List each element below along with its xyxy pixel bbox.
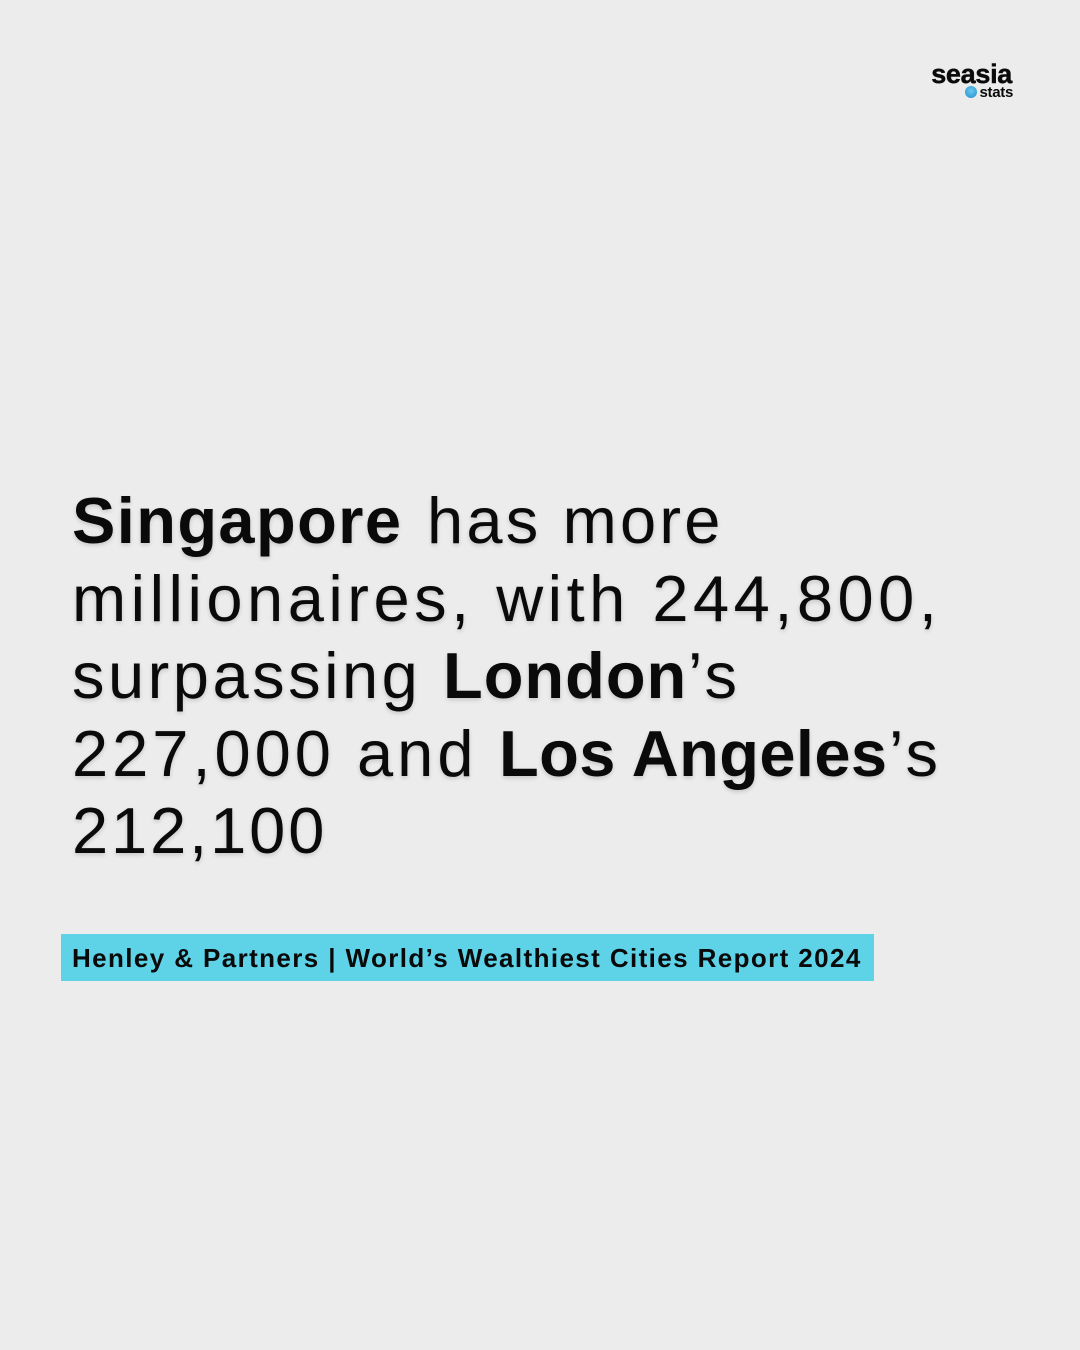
headline line 4: ’s [889, 717, 941, 790]
logo: seasia stats [931, 59, 1013, 101]
headline line 5: 212,100 [72, 794, 327, 867]
headline line 4: 227,000 and [72, 717, 477, 790]
headline line 3: ’s [688, 639, 740, 712]
headline line 3: London [443, 639, 687, 712]
source text: Henley & Partners | World’s Wealthiest Cities Report 2024 [72, 943, 862, 973]
headline [72, 484, 941, 867]
headline line 1 [72, 484, 724, 560]
logo subword: stats [979, 84, 1013, 101]
headline line 3: surpassing [72, 639, 421, 712]
headline line 4: Los Angeles [499, 717, 887, 790]
source label [61, 934, 874, 981]
headline line 1: Singapore [72, 484, 402, 557]
headline line 2: millionaires, with 244,800, [72, 562, 941, 635]
headline line 1: has more [427, 484, 724, 557]
logo wordmark: seasia [931, 59, 1012, 89]
logo dot icon [965, 86, 977, 98]
headline line 3 [72, 639, 740, 715]
headline line 4 [72, 717, 941, 794]
